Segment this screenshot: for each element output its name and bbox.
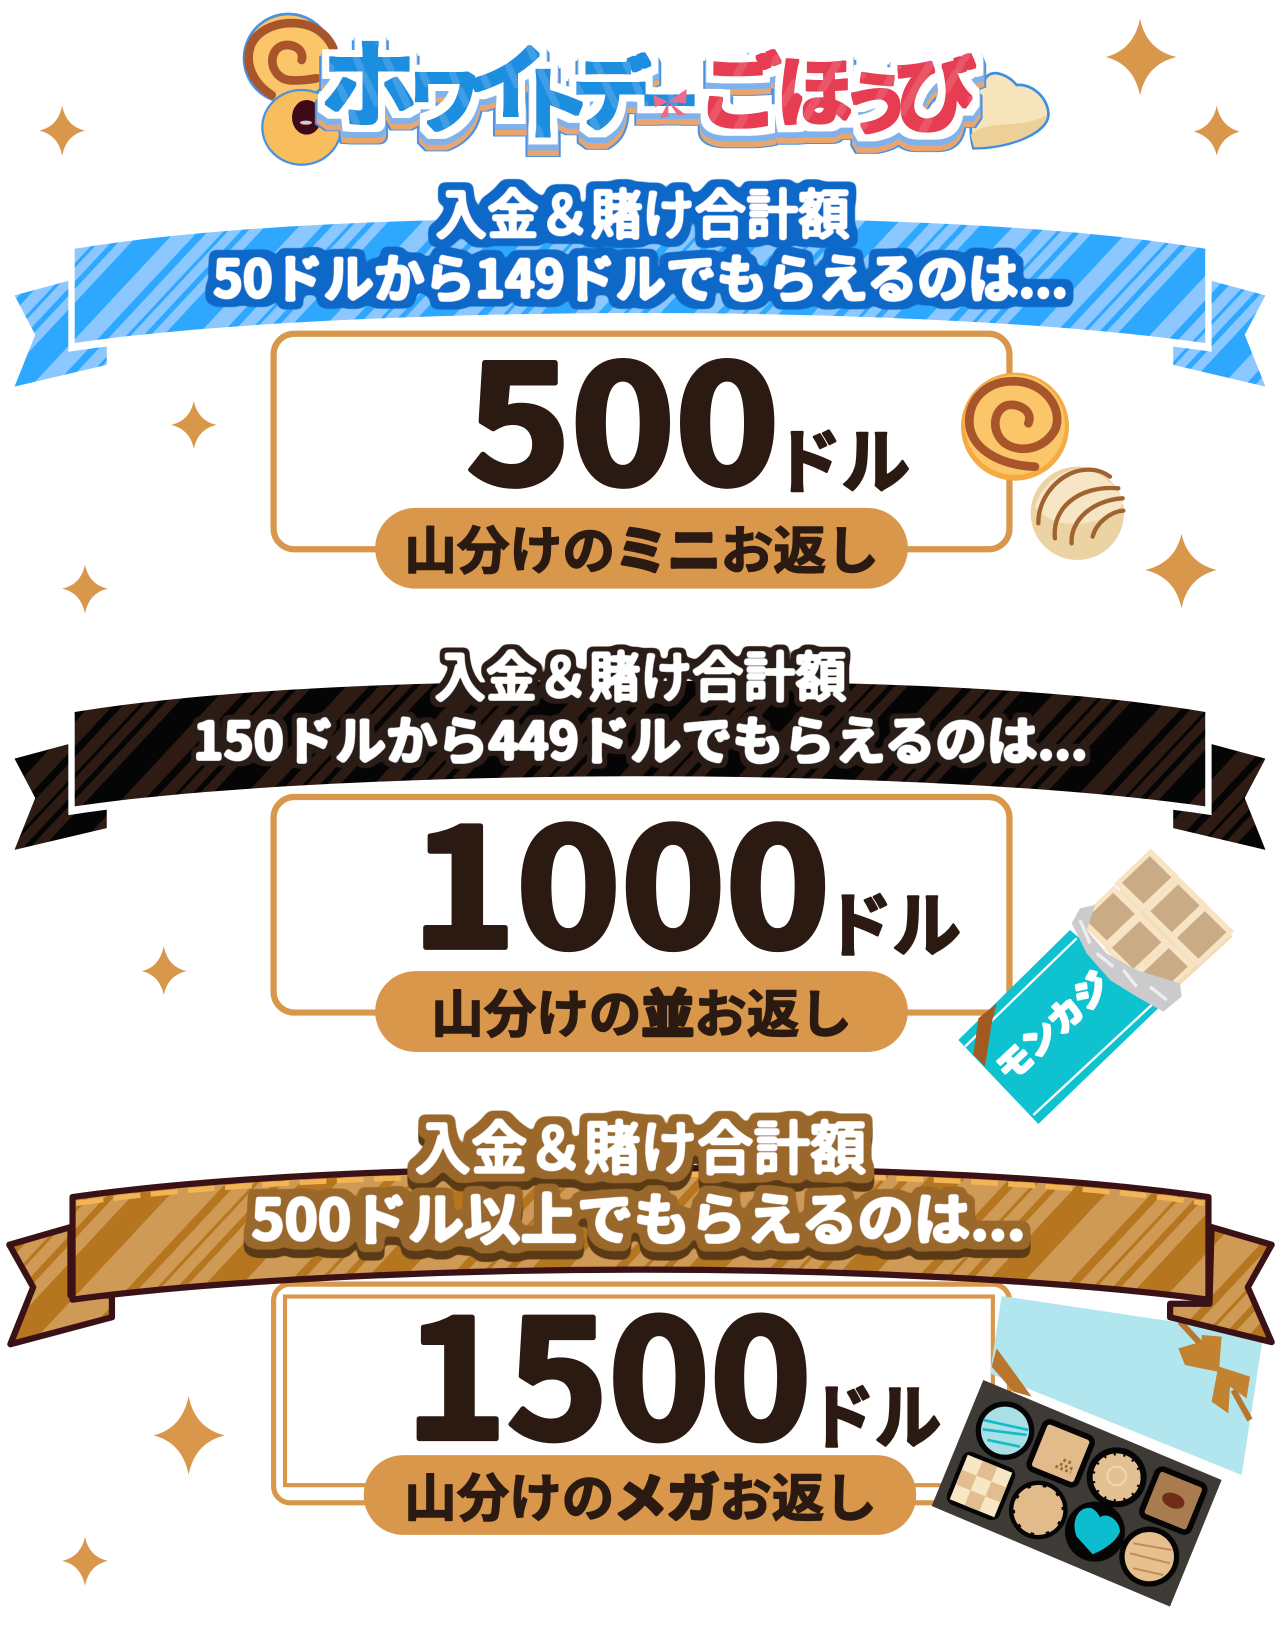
- title text: ワ: [408, 42, 481, 147]
- unit: ドル: [808, 1362, 941, 1464]
- title text: ご: [699, 26, 781, 146]
- ribbon 2 text: [193, 633, 1088, 775]
- icon: bow: [653, 89, 687, 118]
- icon: gift box lid: [990, 1296, 1263, 1475]
- label pill 1: 山分けのミニお返し: [404, 509, 879, 584]
- title text: ほ: [776, 32, 853, 143]
- wrapper: [958, 930, 1160, 1124]
- teal round chocolate: [981, 1407, 1029, 1455]
- foil: [1072, 905, 1182, 1012]
- amount 500: 500: [466, 295, 779, 532]
- flower cookie: [1015, 1487, 1062, 1533]
- section 2: [15, 633, 1265, 1052]
- icon: heart chocolate: [971, 73, 1048, 148]
- title text: ー: [640, 55, 699, 139]
- ribbon 1 text: [213, 171, 1068, 312]
- unit: ドル: [824, 869, 961, 971]
- section 1: [15, 171, 1265, 589]
- striped round: [1125, 1532, 1174, 1581]
- scalloped round cookie: [1095, 1455, 1139, 1499]
- ribbon 3 text: 500ドル以上でもらえるのは...: [251, 1176, 1026, 1257]
- ribbon 3: [9, 1168, 1272, 1344]
- title text: う: [843, 50, 911, 149]
- brand: モンカジ: [983, 959, 1119, 1091]
- reward box 1: [274, 334, 1009, 549]
- ribbon 3 text: 入金＆賭け合計額: [415, 1102, 866, 1186]
- chocolate tiles: [1077, 849, 1234, 999]
- ribbon 1 text: 入金＆賭け合計額: [435, 171, 850, 250]
- icon: truffle: [1031, 467, 1124, 560]
- title text: ト: [513, 42, 592, 156]
- icon: swirl cookie: [961, 373, 1069, 481]
- section 3: [274, 1284, 1009, 1503]
- coffee square: [1144, 1471, 1203, 1530]
- icon: swirl cookie: [244, 14, 333, 103]
- checker: [950, 1455, 1012, 1517]
- reward box 3: [274, 1284, 1009, 1503]
- icon: jam cookie: [262, 90, 341, 165]
- ribbon 2 text: 入金＆賭け合計額: [434, 633, 847, 712]
- icon: chocolate bar: [958, 849, 1234, 1124]
- icon: chocolate tray: [932, 1380, 1222, 1607]
- ribbon 2: [15, 681, 1265, 850]
- title logo: [244, 9, 1048, 165]
- dotted square: [1031, 1424, 1090, 1483]
- title text: イ: [466, 19, 547, 136]
- title text: デ: [572, 31, 651, 145]
- label pill 3: 山分けのメガお返し: [404, 1456, 877, 1531]
- title text: ホ: [321, 9, 417, 147]
- reward box 2: [274, 797, 1009, 1013]
- ribbon 1 text: 50ドルから149ドルでもらえるのは...: [213, 237, 1068, 312]
- ribbon 2 text: 150ドルから449ドルでもらえるのは...: [193, 700, 1088, 775]
- amount 1000: 1000: [411, 758, 830, 995]
- ribbon 3 text: [251, 1102, 1026, 1257]
- amount 1500: 1500: [405, 1250, 812, 1487]
- teal heart: [1075, 1508, 1120, 1554]
- title text: び: [893, 28, 976, 148]
- ribbon 1: [15, 218, 1265, 387]
- unit: ドル: [773, 406, 910, 508]
- title text: [321, 9, 976, 156]
- label pill 2: 山分けの並お返し: [431, 972, 852, 1047]
